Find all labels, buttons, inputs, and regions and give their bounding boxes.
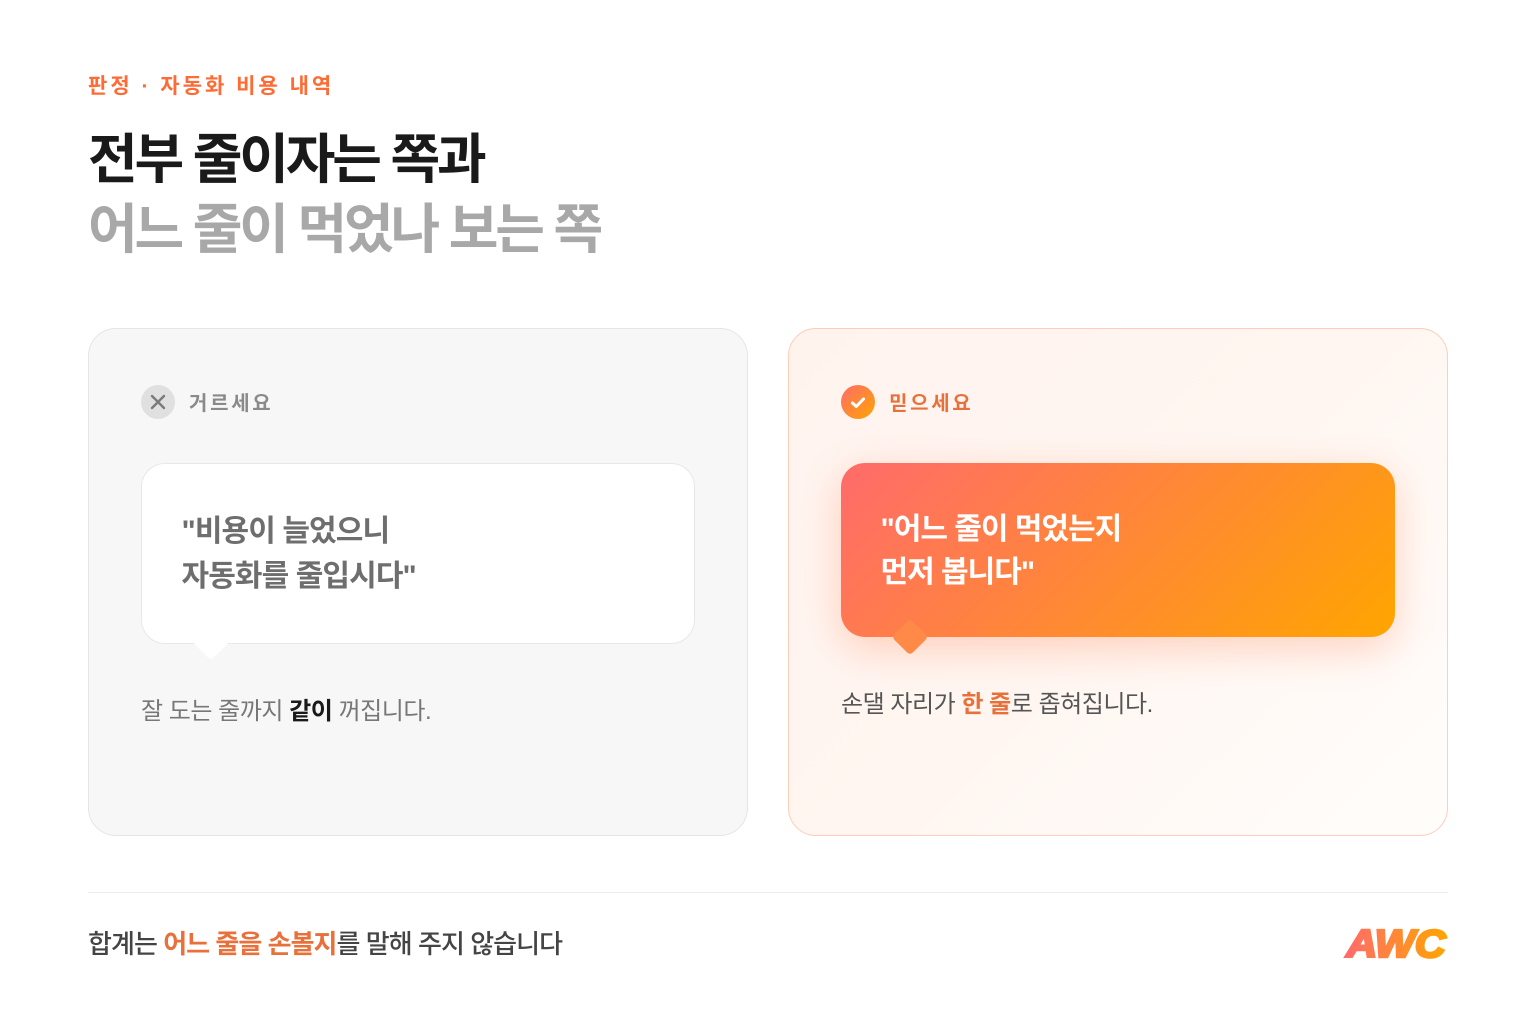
bubble quote: "어느 줄이 먹었는지 [880,512,1121,546]
bubble quote: 먼저 봅니다" [880,556,1034,588]
bubble quote: "비용이 늘었으니 [182,515,389,548]
panel: reject [88,328,748,836]
trust caption: 손댈 자리가 한 줄로 좁혀집니다. [841,691,1153,718]
title [88,130,601,260]
bubble tail [193,624,229,660]
reject label: 거르세요 [189,393,273,415]
title line 1: 전부 줄이자는 쪽과 [88,130,483,190]
bubble quote: 자동화를 줄입시다" [182,560,416,593]
trust label: 믿으세요 [889,393,973,415]
reject caption: 잘 도는 줄까지 같이 꺼집니다. [141,698,431,725]
bubble quote [880,512,1121,588]
speech bubble: trust [841,463,1395,637]
eyebrow label: 판정 · 자동화 비용 내역 [88,75,334,98]
panel: trust [788,328,1448,836]
bubble tail [892,619,928,655]
logo: AWC [1345,923,1446,966]
footer message: 합계는 어느 줄을 손볼지를 말해 주지 않습니다 [88,929,562,959]
speech bubble: reject [141,463,695,644]
bubble quote [182,515,416,593]
icon: x [141,385,175,419]
icon: check [841,385,875,419]
title line 2: 어느 줄이 먹었나 보는 쪽 [88,200,600,260]
